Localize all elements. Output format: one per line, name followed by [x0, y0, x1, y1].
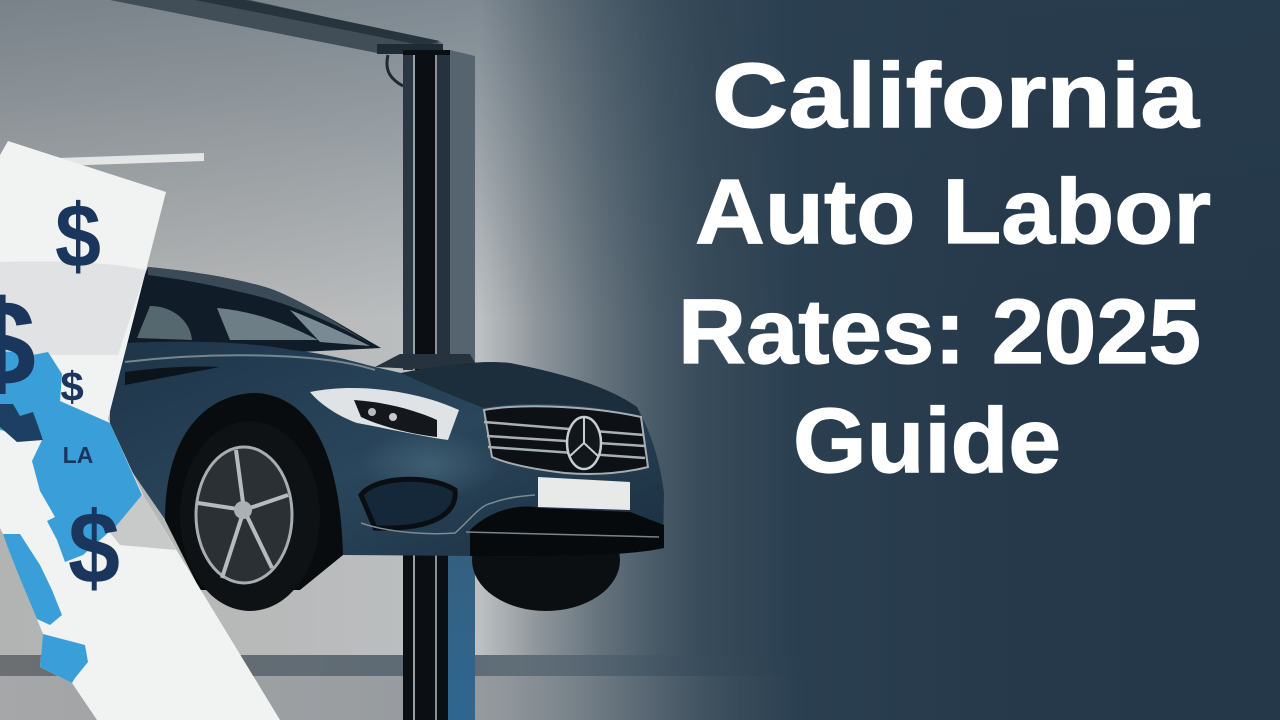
light streak: [0, 153, 204, 168]
car: headlight: [310, 388, 459, 440]
car: lower bumper: [361, 479, 664, 556]
map: blue region north: [0, 352, 142, 562]
title line 3: Rates: 2025: [678, 281, 1201, 383]
map: blue region south: [3, 534, 62, 625]
map: dark inlet: [0, 404, 43, 442]
map: blue region tip: [40, 634, 88, 683]
car: shoulder crease: [125, 355, 375, 370]
title: [678, 45, 1211, 492]
map: faded car ghost: [0, 261, 146, 355]
car: post mount: [375, 354, 480, 372]
car: front wheel: [180, 421, 320, 611]
icon: dollar sign small: $: [60, 363, 84, 410]
map label: LA: LA: [63, 442, 93, 468]
icon: dollar sign bottom: $: [68, 491, 120, 605]
car: fender sheen: [360, 430, 500, 500]
car: [110, 267, 664, 611]
icon: dollar sign top: $: [55, 187, 101, 287]
car: side stripe: [125, 367, 220, 385]
lift overhead beam: [110, 0, 443, 86]
car: wheel arch: [165, 393, 343, 590]
lift post: [403, 50, 475, 720]
title line 1: California: [712, 45, 1200, 147]
car: number plate: [538, 477, 630, 510]
California map panel: [0, 141, 280, 720]
car: body: [110, 342, 664, 575]
car: roof and windows: [110, 267, 381, 360]
car: grille: [484, 406, 648, 474]
title line 2: Auto Labor: [695, 161, 1211, 263]
map: grey floor patch: [100, 495, 176, 550]
car: dark hood: [401, 362, 650, 440]
car: far front wheel: [472, 509, 620, 611]
title line 4: Guide: [793, 390, 1061, 492]
